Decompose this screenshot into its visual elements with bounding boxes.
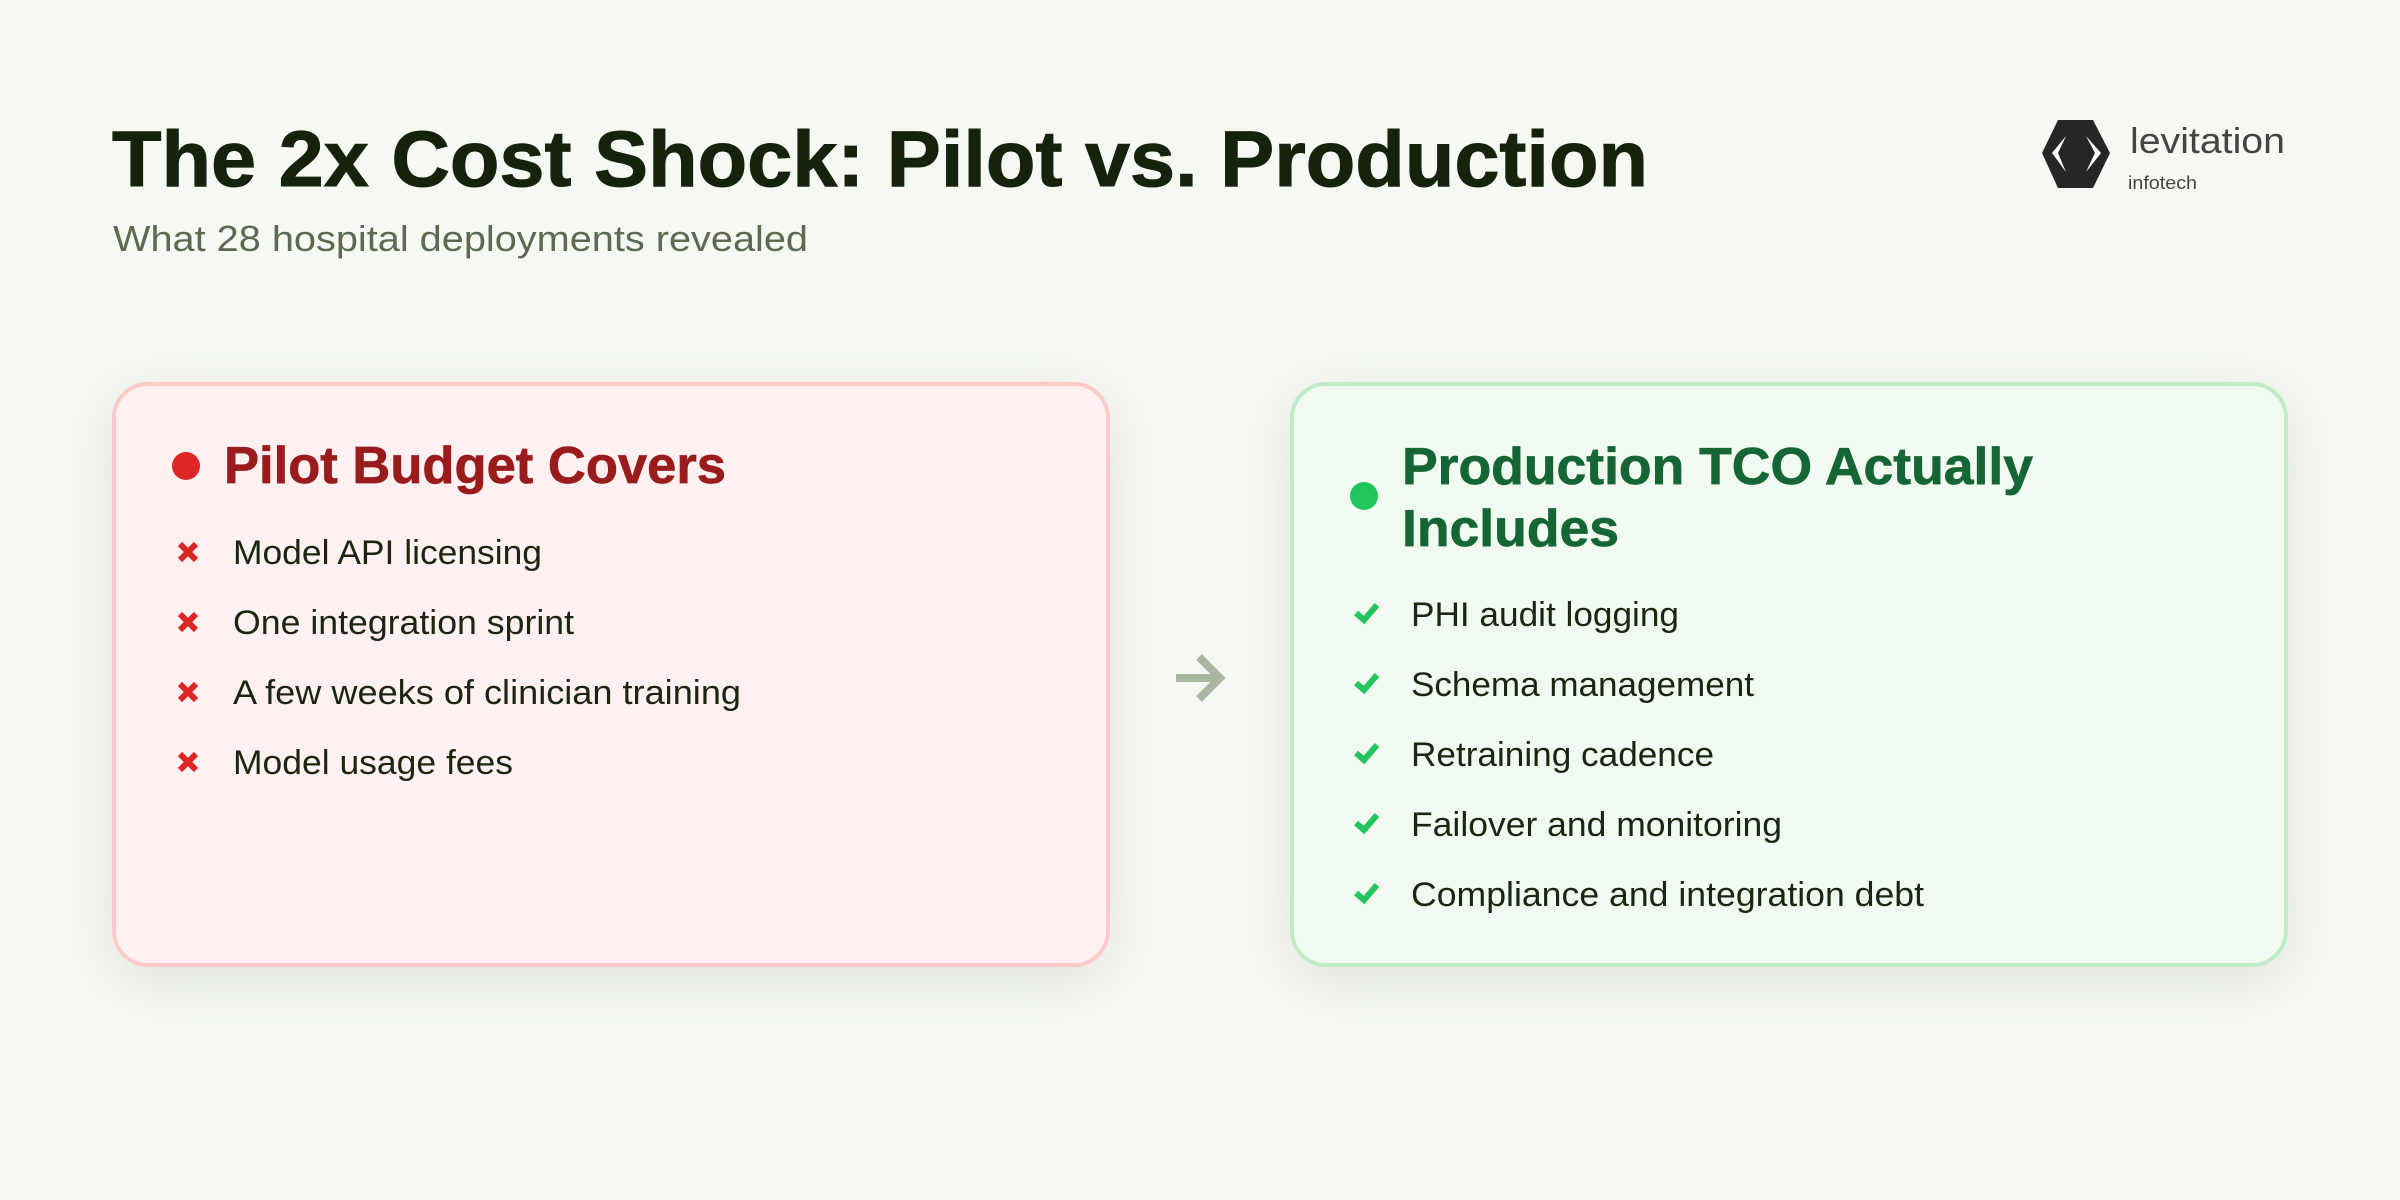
- icon: cross: [180, 684, 196, 700]
- logo tagline: infotech: [2128, 173, 2197, 193]
- pilot heading bullet: [172, 452, 200, 480]
- pilot heading: Pilot Budget Covers: [224, 437, 726, 495]
- icon: cross: [180, 754, 196, 770]
- icon: check: [1356, 885, 1377, 900]
- production heading bullet: [1350, 482, 1378, 510]
- logo: levitation infotech: [2042, 120, 2285, 193]
- production item: Failover and monitoring: [1411, 806, 1782, 844]
- logo hexagon mark: [2042, 120, 2110, 188]
- icon: check: [1356, 815, 1377, 830]
- icon: cross: [180, 544, 196, 560]
- logo wordmark: levitation: [2130, 120, 2285, 161]
- production item: Schema management: [1411, 666, 1755, 704]
- production item: Compliance and integration debt: [1411, 876, 1925, 914]
- subtitle: What 28 hospital deployments revealed: [113, 218, 808, 259]
- panel: production TCO includes: [1290, 382, 2288, 967]
- production item: Retraining cadence: [1411, 736, 1714, 774]
- icon: cross: [180, 614, 196, 630]
- icon: check: [1356, 675, 1377, 690]
- production item: PHI audit logging: [1411, 596, 1679, 634]
- pilot item: Model usage fees: [233, 744, 513, 782]
- pilot item: Model API licensing: [233, 534, 542, 572]
- pilot item: One integration sprint: [233, 604, 575, 642]
- icon: check: [1356, 745, 1377, 760]
- pilot item: A few weeks of clinician training: [233, 674, 741, 712]
- icon: arrow between panels: [1176, 657, 1220, 699]
- production heading second line: Includes: [1402, 500, 1619, 558]
- panel: pilot budget covers: [112, 382, 1110, 967]
- production heading: Production TCO Actually: [1402, 438, 2033, 496]
- title: The 2x Cost Shock: Pilot vs. Production: [112, 114, 1648, 203]
- icon: check: [1356, 605, 1377, 620]
